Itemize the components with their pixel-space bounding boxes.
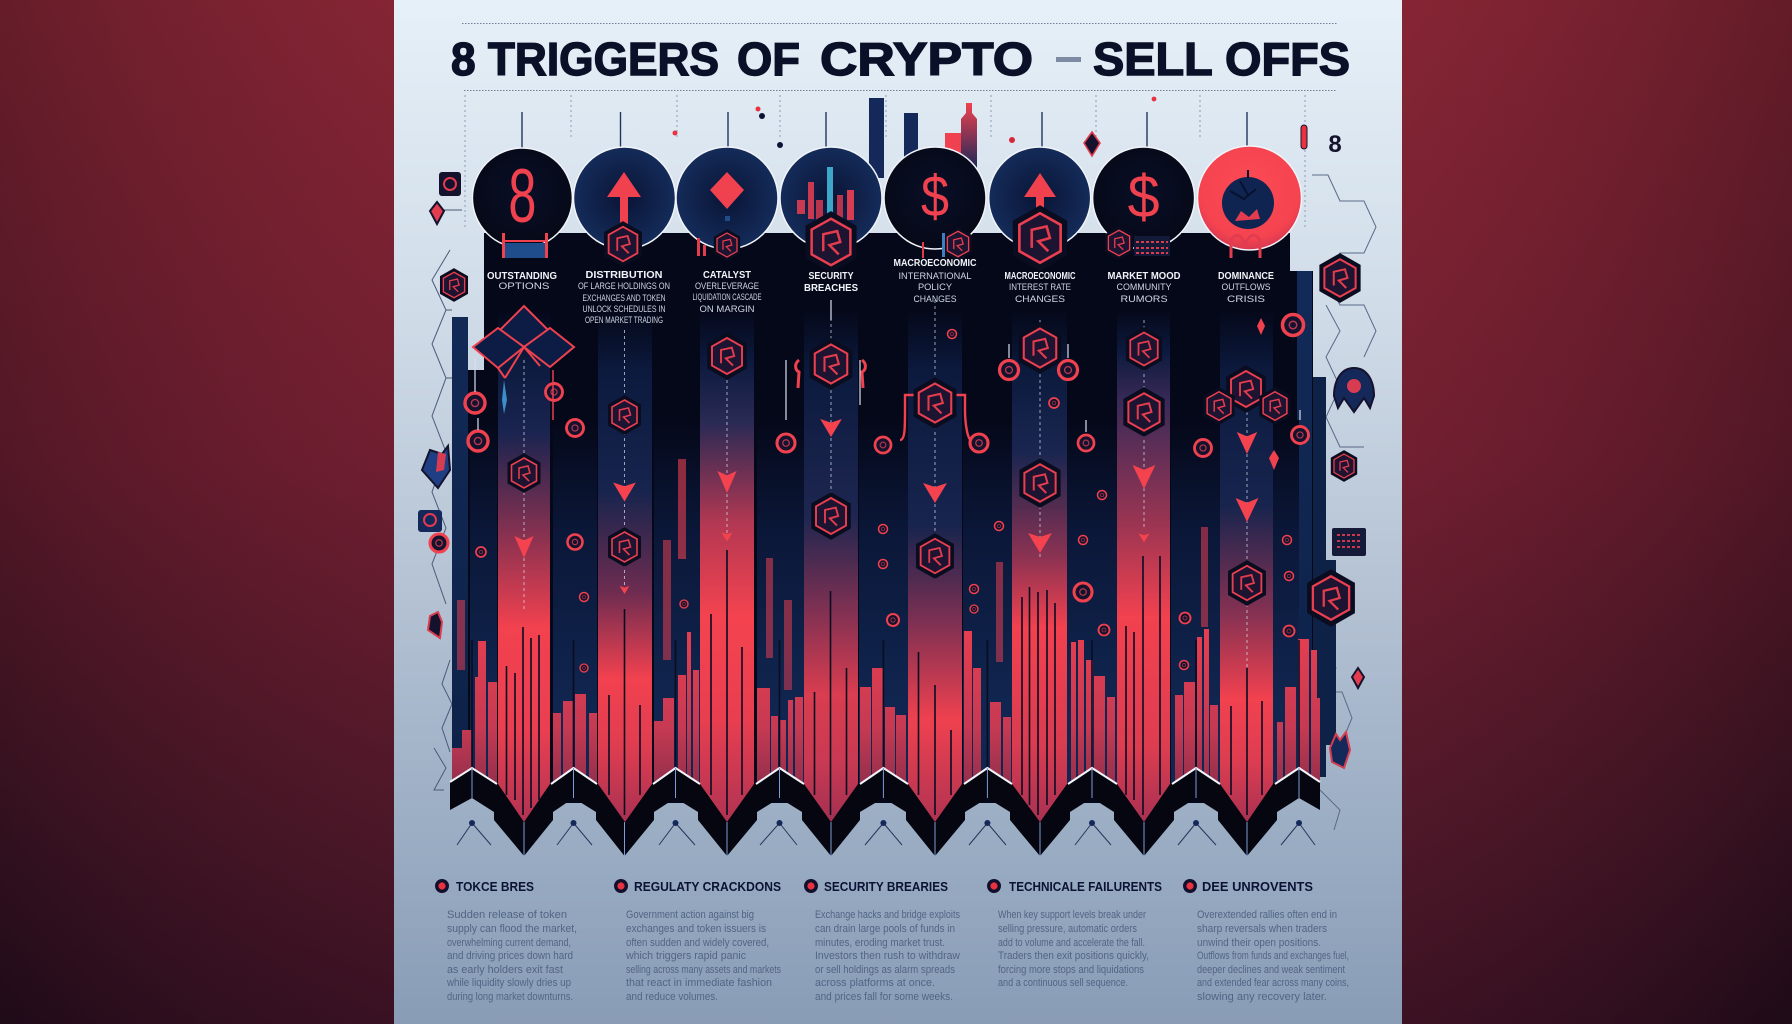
circle 4: bars xyxy=(780,147,882,249)
label 3 xyxy=(692,270,762,314)
icon: top eight: 8 xyxy=(1328,131,1342,158)
circle 5: dollar xyxy=(884,147,986,249)
label 1 xyxy=(487,271,557,291)
text block 3: Exchange hacks and bridge exploits xyxy=(815,909,960,921)
text block 2: and reduce volumes. xyxy=(626,991,718,1003)
text block 1: as early holders exit fast xyxy=(447,964,563,976)
label 2: OPEN MARKET TRADING xyxy=(585,315,663,325)
text block 2: exchanges and token issuers is xyxy=(626,923,766,935)
label 7: MARKET MOOD xyxy=(1108,271,1180,282)
title: 8 TRIGGERS xyxy=(451,33,719,85)
text block 1: during long market downturns. xyxy=(447,991,573,1003)
icon: left cluster xyxy=(422,446,450,488)
label 7: COMMUNITY xyxy=(1116,282,1172,292)
icon: right shield xyxy=(1334,368,1374,412)
label 2: EXCHANGES AND TOKEN xyxy=(582,293,666,303)
icon: left badge xyxy=(418,510,442,532)
label 2: UNLOCK SCHEDULES IN xyxy=(582,304,666,314)
gap columns xyxy=(470,420,1299,790)
icon: hex under circle 6 xyxy=(1017,210,1063,266)
icon: left hex xyxy=(442,271,466,299)
text block 3: and prices fall for some weeks. xyxy=(815,991,953,1003)
hexagon network left xyxy=(432,210,462,790)
icon: right dark box xyxy=(1332,528,1366,556)
circle 5: dollar: $ xyxy=(921,164,949,229)
text block 5: Overextended rallies often end in xyxy=(1197,909,1337,921)
wide gradient columns xyxy=(498,310,1273,822)
heading block 5: DEE UNROVENTS xyxy=(1202,879,1313,894)
label 2: OF LARGE HOLDINGS ON xyxy=(578,281,670,291)
circle 1: eight xyxy=(472,148,572,248)
text block 1: while liquidity slowly dries up xyxy=(446,977,571,989)
icon: left square glyph xyxy=(439,172,461,196)
label 4 xyxy=(804,271,858,294)
column 4 markers xyxy=(777,300,899,626)
text block 1: and driving prices down hard xyxy=(447,950,573,962)
bar chart behind circles xyxy=(672,97,1156,178)
column 5 markers xyxy=(875,330,988,613)
panel: infographic sheet xyxy=(394,0,1402,1024)
text block 4 xyxy=(998,909,1149,989)
text block 3: Investors then rush to withdraw xyxy=(815,950,960,962)
icon: right small hex xyxy=(1333,452,1355,480)
label 6: CHANGES xyxy=(1015,294,1065,304)
icon: big right hex xyxy=(1311,573,1351,623)
label 3: CATALYST xyxy=(703,270,751,281)
column 8 markers xyxy=(1206,314,1308,636)
label 7: RUMORS xyxy=(1120,294,1168,304)
heading block 3: SECURITY BREARIES xyxy=(824,879,948,894)
text block 5 xyxy=(1197,909,1349,1003)
label 2: DISTRIBUTION xyxy=(586,270,662,281)
label 5: POLICY xyxy=(918,282,952,292)
text block 1: supply can flood the market, xyxy=(447,923,577,935)
label 6: INTEREST RATE xyxy=(1009,282,1071,292)
label 8: DOMINANCE xyxy=(1218,271,1274,282)
text block 1 xyxy=(446,909,577,1003)
text block 2: Government action against big xyxy=(626,909,754,921)
text block 4: forcing more stops and liquidations xyxy=(998,964,1144,976)
icon: top diamond xyxy=(1084,132,1100,156)
text block 3: minutes, eroding market trust. xyxy=(815,937,945,949)
title: OF xyxy=(737,33,800,85)
label 3: LIQUIDATION CASCADE xyxy=(692,292,762,302)
text block 4: add to volume and accelerate the fall. xyxy=(998,937,1145,949)
text block 3: can drain large pools of funds in xyxy=(815,923,955,935)
icon: hex under circle 2 xyxy=(607,224,639,264)
label 5: CHANGES xyxy=(914,294,956,304)
label 2 xyxy=(578,270,670,325)
label 3: ON MARGIN xyxy=(700,304,754,314)
label 1: OPTIONS xyxy=(498,281,550,291)
hexagon network right xyxy=(1312,175,1376,830)
icon: hex under circle 5 xyxy=(922,230,970,258)
circle 2: up arrow xyxy=(574,147,676,249)
title: SELL OFFS xyxy=(1093,33,1350,85)
text block 5: sharp reversals when traders xyxy=(1197,923,1327,935)
label 7 xyxy=(1108,271,1180,304)
text block 2: often sudden and widely covered, xyxy=(626,937,769,949)
peak markers below chevrons xyxy=(457,820,1315,845)
side shading left xyxy=(0,0,394,1024)
text block 4: and a continuous sell sequence. xyxy=(998,977,1128,989)
icon: right lower cluster xyxy=(1330,732,1350,768)
icon: right diamond xyxy=(1352,668,1364,688)
text block 1: Sudden release of token xyxy=(447,909,567,921)
circle 7: dollar xyxy=(1093,147,1195,249)
icon: left diamond xyxy=(430,202,444,224)
label 4: BREACHES xyxy=(804,283,858,294)
label 6 xyxy=(1004,271,1076,304)
icon: hex under circle 4 xyxy=(809,216,853,268)
text block 3 xyxy=(815,909,960,1003)
text block 5: slowing any recovery later. xyxy=(1197,991,1327,1003)
column 7 markers xyxy=(1126,330,1212,670)
icon: left hex small xyxy=(430,534,448,552)
panel: dark column block xyxy=(452,233,1336,803)
heading block 1: TOKCE BRES xyxy=(456,879,534,894)
text block 4: When key support levels break under xyxy=(998,909,1146,921)
side shading right xyxy=(1402,0,1792,1024)
icon: diamond cluster column 1 xyxy=(473,306,574,378)
text block 4: Traders then exit positions quickly, xyxy=(998,950,1149,962)
text block 2 xyxy=(625,909,781,1003)
label 5 xyxy=(894,258,976,304)
column 6 markers xyxy=(994,326,1110,636)
circle 3: diamond xyxy=(676,147,778,249)
icon: right hex xyxy=(1322,257,1358,299)
icon: hex under circle 3 xyxy=(697,231,738,259)
column 3 markers xyxy=(680,336,744,608)
label 8: OUTFLOWS xyxy=(1222,282,1270,292)
label 8 xyxy=(1218,271,1274,304)
icon: bar under circle 1 xyxy=(502,233,548,258)
icon: hourglass under circle 8 xyxy=(1231,235,1260,258)
text block 5: deeper declines and weak sentiment xyxy=(1197,964,1345,976)
icon: left lower cluster xyxy=(428,612,442,638)
chevron highlights xyxy=(450,768,1320,856)
text block 4: selling pressure, automatic orders xyxy=(998,923,1137,935)
column 2 markers xyxy=(610,398,638,594)
title xyxy=(451,33,1350,85)
text block 5: and extended fear across many coins, xyxy=(1197,977,1349,989)
label 4: SECURITY xyxy=(808,271,854,282)
heading block 4: TECHNICALE FAILURENTS xyxy=(1009,879,1162,894)
text block 3: across platforms at once. xyxy=(815,977,935,989)
text block 5: unwind their open positions. xyxy=(1197,937,1321,949)
text block 2: which triggers rapid panic xyxy=(625,950,746,962)
text block 3: or sell holdings as alarm spreads xyxy=(815,964,955,976)
text block 1: overwhelming current demand, xyxy=(447,937,571,949)
label 1: OUTSTANDING xyxy=(487,271,557,282)
icon: red pill xyxy=(1301,125,1307,149)
title: CRYPTO xyxy=(820,33,1033,85)
label 8: CRISIS xyxy=(1227,294,1265,304)
zigzag base band xyxy=(450,768,1320,856)
circle 8: globe xyxy=(1198,146,1302,250)
stepped red bars xyxy=(452,459,1320,790)
label 5: INTERNATIONAL xyxy=(898,271,972,281)
heading block 2: REGULATY CRACKDONS xyxy=(634,879,781,894)
label 6: MACROECONOMIC xyxy=(1004,271,1076,282)
column 1 markers xyxy=(465,358,588,672)
label 3: OVERLEVERAGE xyxy=(695,281,759,291)
label 5: MACROECONOMIC xyxy=(894,258,976,269)
icon: hex under circle 7 xyxy=(1107,229,1170,257)
circle 1: eight: 8 xyxy=(508,154,536,239)
text block 5: Outflows from funds and exchanges fuel, xyxy=(1197,950,1349,962)
circle 7: dollar: $ xyxy=(1128,163,1160,230)
text block 2: that react in immediate fashion xyxy=(626,977,772,989)
circle 6: up arrow xyxy=(989,147,1091,249)
text block 2: selling across many assets and markets xyxy=(626,964,781,976)
